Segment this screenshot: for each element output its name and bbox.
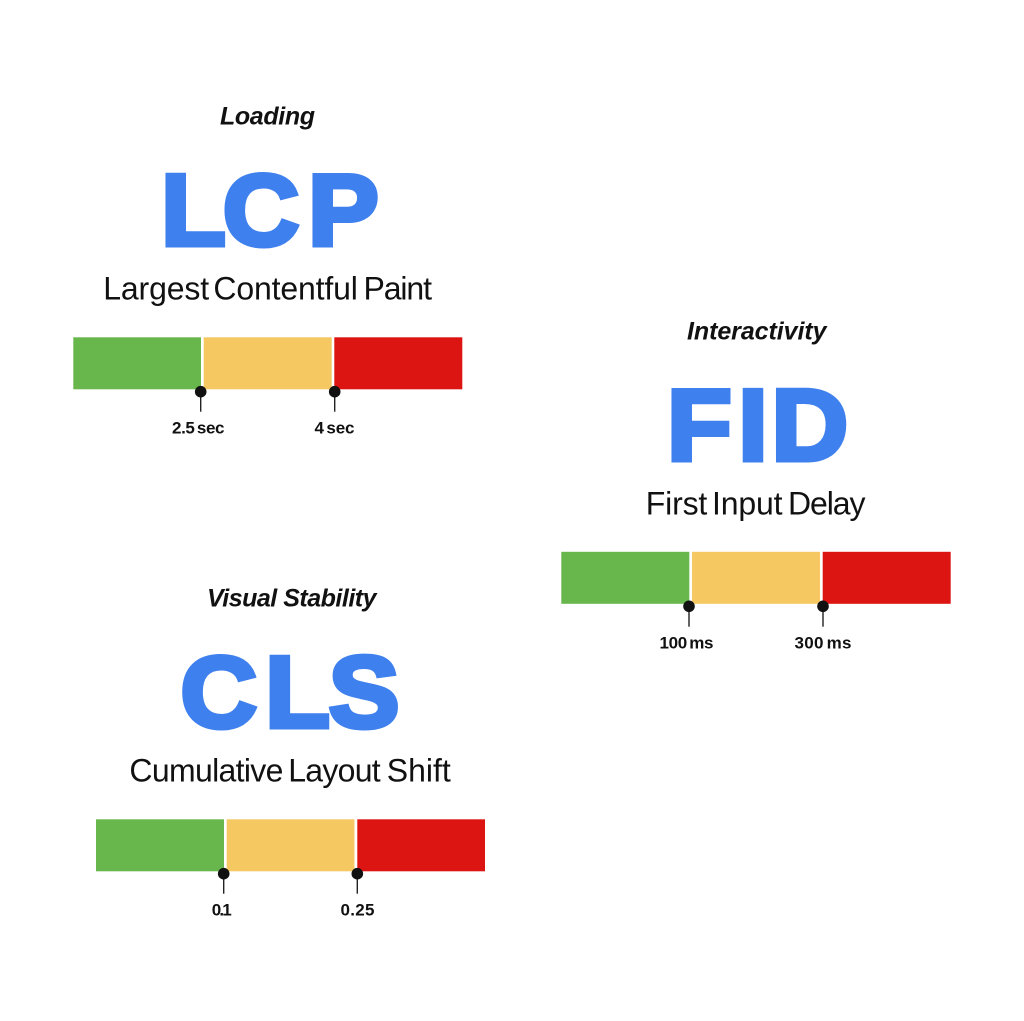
gauge bar: LCP: [73, 337, 462, 389]
subtitle: Largest Contentful Paint: [103, 270, 432, 306]
marker: 4 sec: [314, 386, 354, 437]
title: CLS: CLS: [180, 635, 400, 748]
marker: 300 ms: 300 ms: [794, 633, 852, 652]
marker: 100 ms: [660, 600, 714, 652]
panel: CLS: [96, 584, 485, 919]
subtitle: First Input Delay: First: [646, 485, 707, 521]
marker: 2.5 sec: [172, 386, 224, 437]
gauge bar: FID: [561, 552, 951, 604]
subtitle: Cumulative Layout Shift: Cumulative: [129, 752, 283, 788]
marker: 0.1: 0.1: [212, 900, 232, 919]
heading: Loading: Loading: [220, 102, 315, 130]
heading: Interactivity: Interactivity: [687, 317, 828, 345]
marker: 300 ms: [794, 600, 852, 652]
title: LCP: LCP: [161, 153, 379, 266]
subtitle: First Input Delay: [646, 485, 866, 521]
subtitle: Cumulative Layout Shift: [129, 752, 451, 788]
subtitle: First Input Delay: Input: [712, 485, 783, 521]
marker: 100 ms: 100 ms: [660, 633, 714, 652]
heading: Visual Stability: Visual Stability: [207, 584, 378, 612]
marker: 0.1: [212, 868, 232, 919]
marker: 0.25: [340, 868, 374, 919]
subtitle: Largest Contentful Paint: Largest: [103, 270, 209, 306]
panel: FID: [561, 317, 951, 652]
title: FID: FID: [667, 368, 848, 481]
marker: 2.5 sec: 2.5 sec: [172, 418, 224, 437]
gauge bar: CLS: [96, 819, 485, 871]
marker: 0.25: 0.25: [340, 900, 374, 919]
subtitle: Cumulative Layout Shift: Shift: [387, 752, 451, 788]
subtitle: First Input Delay: Delay: [788, 485, 866, 521]
panel: LCP: [73, 102, 462, 437]
subtitle: Largest Contentful Paint: Paint: [364, 270, 432, 306]
subtitle: Cumulative Layout Shift: Layout: [288, 752, 381, 788]
marker: 4 sec: 4 sec: [314, 418, 354, 437]
subtitle: Largest Contentful Paint: Contentful: [213, 270, 358, 306]
